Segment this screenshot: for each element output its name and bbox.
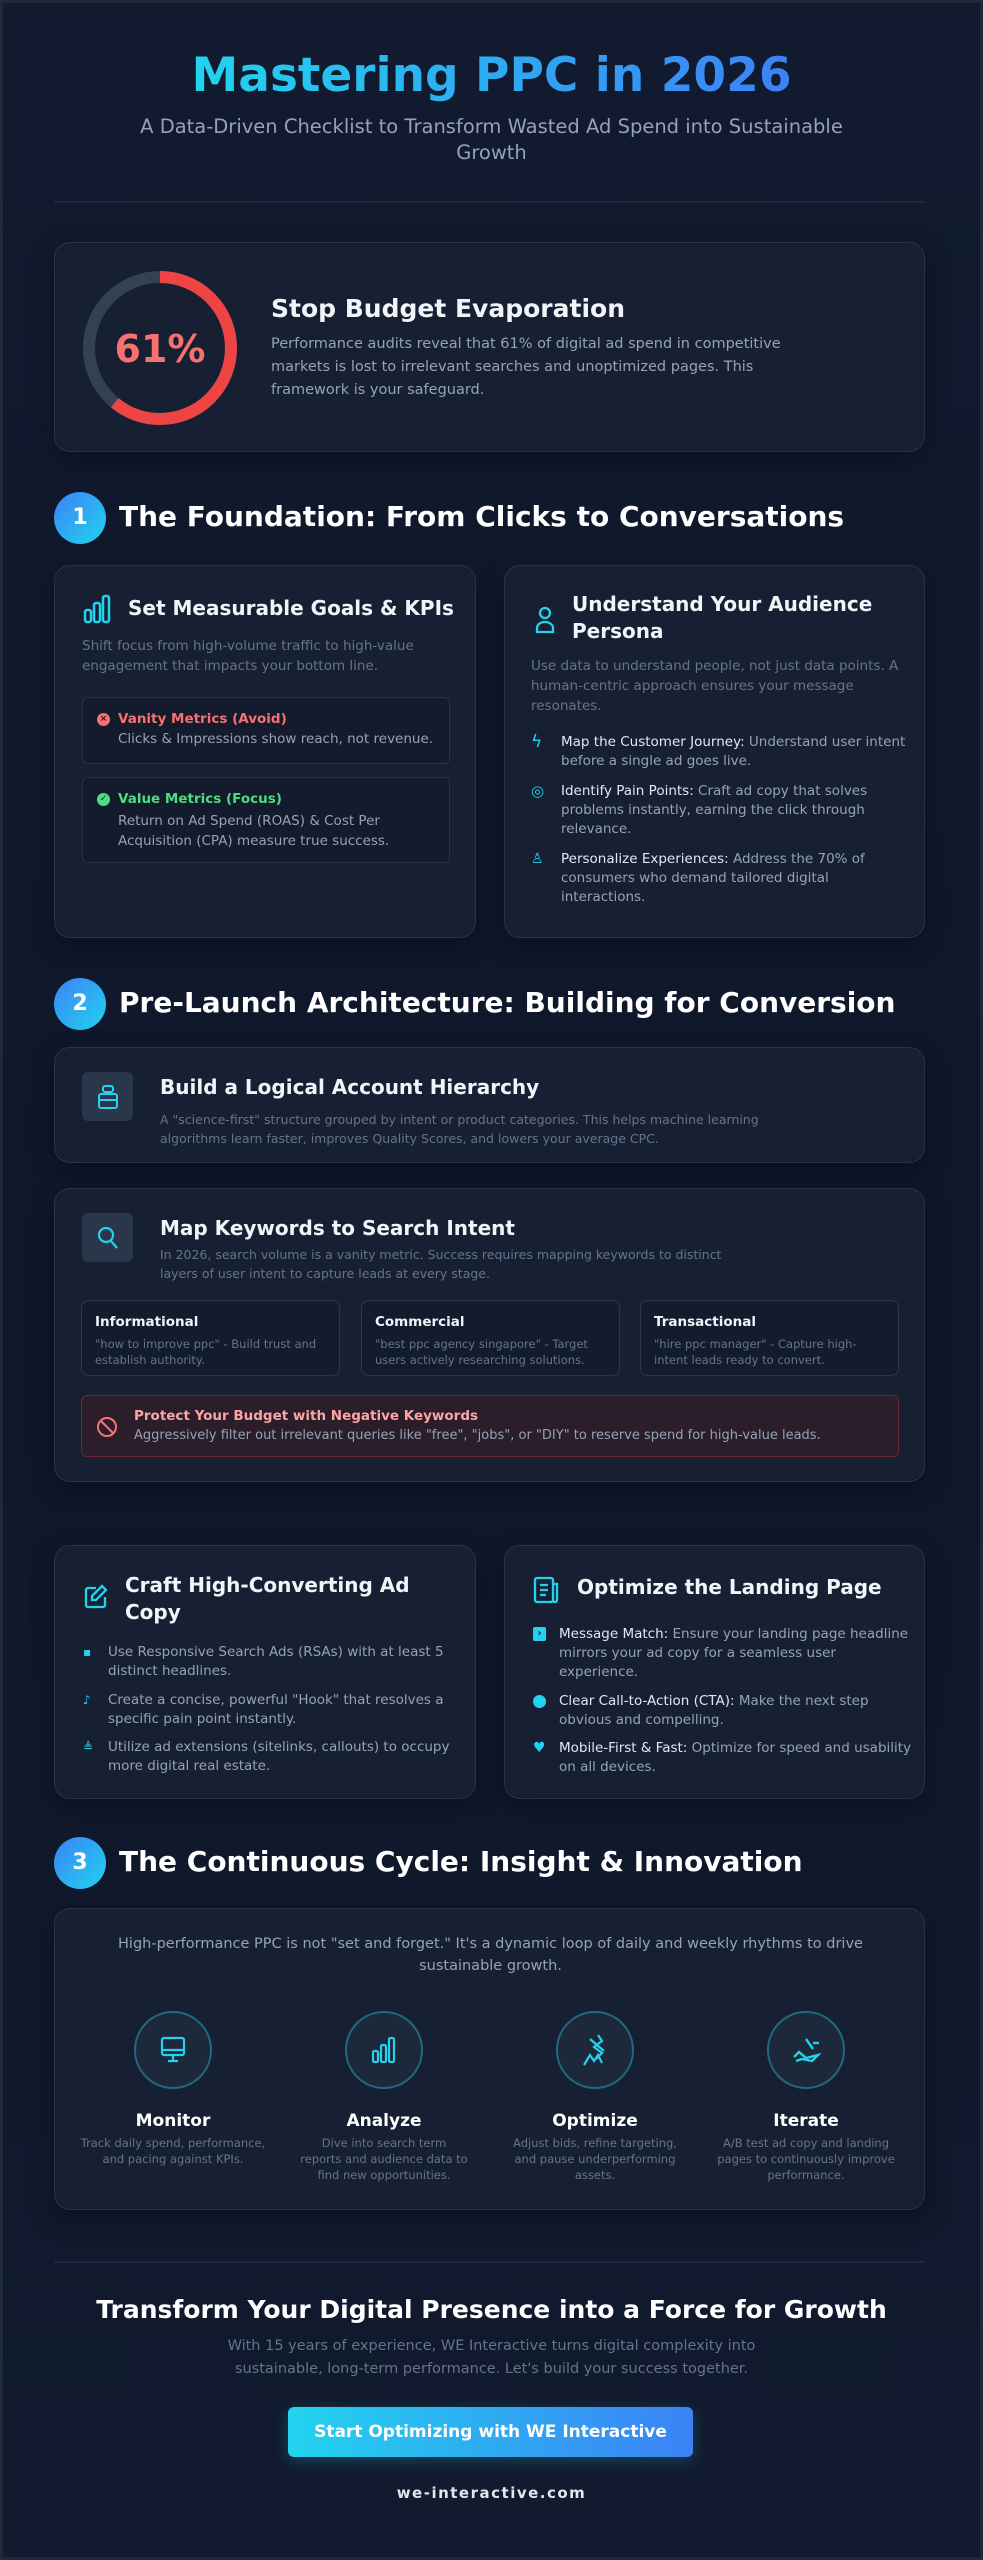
panel: landing page: Mobile-First & Fast: Optimize for speed and usability on all devices. bbox=[559, 1740, 911, 1775]
callout: negative keywords: Protect Your Budget with Negative Keywords bbox=[134, 1408, 478, 1424]
panel: ad copy: Create a concise, powerful "Hook" that resolves a specific pain point instantly. bbox=[108, 1692, 444, 1727]
icon: document bbox=[534, 1576, 558, 1604]
panel: audience persona bbox=[504, 565, 925, 938]
text: Use data to understand people, not just data points. A human-centric approach ensures your message resonates. bbox=[531, 658, 898, 714]
icon: person bbox=[536, 606, 554, 634]
heading: section 3 bbox=[54, 1837, 803, 1889]
step: analyze: Analyze bbox=[346, 2111, 422, 2131]
callout: vanity metrics bbox=[82, 697, 450, 764]
text: intro: High-performance PPC is not "set and forget." It's a dynamic loop of daily and weekly rhythms to drive sustainable growth. bbox=[118, 1936, 863, 1974]
icon: edit bbox=[84, 1584, 108, 1608]
list item: personalize: ♙ bbox=[531, 851, 544, 867]
heading: section 2: 2 bbox=[72, 991, 88, 1016]
chart: 61% ring bbox=[83, 271, 237, 425]
step: monitor: Monitor bbox=[136, 2111, 210, 2131]
icon: prohibited bbox=[97, 1417, 117, 1437]
heading: section 2 bbox=[54, 978, 895, 1030]
heading: section 1: The Foundation: From Clicks to Conversations bbox=[119, 500, 844, 533]
list: Use Responsive Search Ads (RSAs) with at least 5 distinct headlines. bbox=[108, 1644, 444, 1679]
box: transactional: Transactional bbox=[654, 1314, 756, 1330]
text: CTA description: With 15 years of experience, WE Interactive turns digital complexity into sustainable, long-term performance. Let's build your success together. bbox=[228, 2338, 755, 2377]
icon: search bbox=[82, 1213, 133, 1262]
panel: landing page bbox=[504, 1545, 925, 1799]
panel: goals & KPIs bbox=[54, 565, 476, 938]
heading: section 2: Pre-Launch Architecture: Building for Conversion bbox=[119, 986, 895, 1019]
callout: value metrics: Return on Ad Spend (ROAS) & Cost Per Acquisition (CPA) measure true success. bbox=[118, 813, 389, 849]
panel: landing page: ♥ bbox=[533, 1740, 546, 1756]
step: iterate bbox=[717, 2011, 895, 2182]
step: optimize: Adjust bids, refine targeting, and pause underperforming assets. bbox=[513, 2136, 677, 2182]
heading: Optimize the Landing Page bbox=[577, 1575, 882, 1599]
callout: value metrics: ✓ bbox=[100, 794, 107, 804]
callout: value metrics bbox=[82, 777, 450, 863]
heading: Craft High-Converting Ad Copy bbox=[125, 1573, 410, 1624]
callout: vanity metrics: Clicks & Impressions show reach, not revenue. bbox=[118, 731, 433, 747]
text: Shift focus from high-volume traffic to high-value engagement that impacts your bottom line. bbox=[82, 638, 414, 674]
panel: continuous cycle bbox=[54, 1908, 925, 2210]
heading: CTA: Transform Your Digital Presence into a Force for Growth bbox=[96, 2295, 887, 2324]
box: commercial: "best ppc agency singapore" - Target users actively researching solutions. bbox=[375, 1337, 588, 1367]
icon: bar chart bbox=[84, 594, 110, 624]
button: CTA: Start Optimizing with WE Interactive bbox=[314, 2422, 667, 2442]
panel: stat card bbox=[54, 242, 925, 452]
heading: section 1 bbox=[54, 492, 844, 544]
heading: Map Keywords to Search Intent bbox=[160, 1216, 515, 1240]
icon: layers bbox=[82, 1072, 133, 1121]
panel: landing page: Clear Call-to-Action (CTA): Make the next step obvious and compelling. bbox=[559, 1693, 869, 1728]
text: A "science-first" structure grouped by intent or product categories. This helps machine learning algorithms learn faster, improves Quality Scores, and lowers your average CPC. bbox=[160, 1112, 759, 1146]
list item: pain points: Identify Pain Points: Craft ad copy that solves problems instantly, earning the click through relevance. bbox=[561, 783, 867, 837]
heading: section 3: 3 bbox=[72, 1850, 88, 1875]
heading: Understand Your Audience Persona bbox=[572, 592, 872, 643]
box: informational: "how to improve ppc" - Build trust and establish authority. bbox=[95, 1337, 316, 1367]
box: commercial: Commercial bbox=[375, 1314, 464, 1330]
list item: personalize: Personalize Experiences: Address the 70% of consumers who demand tailored digital interactions. bbox=[561, 851, 865, 905]
heading: section 3: The Continuous Cycle: Insight & Innovation bbox=[119, 1845, 803, 1878]
heading: Set Measurable Goals & KPIs bbox=[128, 596, 454, 620]
panel: ad copy: Utilize ad extensions (sitelinks, callouts) to occupy more digital real estate. bbox=[108, 1739, 449, 1774]
callout: vanity metrics: Vanity Metrics (Avoid) bbox=[118, 711, 287, 727]
list: Message Match: Ensure your landing page headline mirrors your ad copy for a seamless user experience. bbox=[559, 1626, 908, 1680]
box: commercial bbox=[361, 1300, 620, 1376]
list item: journey: Map the Customer Journey: Understand user intent before a single ad goes live. bbox=[561, 734, 905, 769]
panel: account hierarchy bbox=[54, 1047, 925, 1163]
panel: ad copy: ≜ bbox=[83, 1740, 93, 1754]
heading: section 1: 1 bbox=[72, 505, 88, 530]
step: analyze bbox=[300, 2011, 468, 2182]
step: optimize bbox=[513, 2011, 677, 2182]
panel: keywords intent bbox=[54, 1188, 925, 1482]
heading: Build a Logical Account Hierarchy bbox=[160, 1075, 539, 1099]
button: CTA bbox=[288, 2407, 693, 2457]
step: analyze: Dive into search term reports and audience data to find new opportunities. bbox=[300, 2136, 468, 2182]
box: transactional bbox=[640, 1300, 899, 1376]
step: monitor: Track daily spend, performance, and pacing against KPIs. bbox=[81, 2136, 265, 2166]
step: monitor bbox=[80, 2011, 265, 2166]
text: In 2026, search volume is a vanity metric. Success requires mapping keywords to distinct layers of user intent to capture leads at every stage. bbox=[160, 1247, 721, 1281]
title: Mastering PPC in 2026 bbox=[191, 48, 792, 103]
step: iterate: Iterate bbox=[773, 2111, 839, 2131]
text: stat description: Performance audits reveal that 61% of digital ad spend in competitive markets is lost to irrelevant searches and unoptimized pages. This framework is your safeguard. bbox=[271, 336, 781, 398]
callout: vanity metrics: × bbox=[100, 714, 107, 724]
box: transactional: "hire ppc manager" - Capture high-intent leads ready to convert. bbox=[654, 1337, 857, 1367]
subtitle: A Data-Driven Checklist to Transform Wasted Ad Spend into Sustainable Growth bbox=[140, 115, 843, 164]
box: informational: Informational bbox=[95, 1314, 198, 1330]
list item: pain points: ◎ bbox=[531, 782, 544, 800]
text: url: we-interactive.com bbox=[397, 2484, 586, 2502]
step: optimize: Optimize bbox=[552, 2111, 638, 2131]
heading: stop budget: Stop Budget Evaporation bbox=[271, 294, 625, 323]
list: ▪ bbox=[83, 1645, 91, 1659]
chart: 61% ring: 61% bbox=[115, 327, 205, 371]
callout: negative keywords bbox=[81, 1395, 899, 1457]
list: › bbox=[537, 1628, 542, 1639]
panel: ad copy bbox=[54, 1545, 476, 1799]
callout: negative keywords: Aggressively filter out irrelevant queries like "free", "jobs", or "DIY" to reserve spend for high-value leads. bbox=[134, 1428, 821, 1443]
panel: ad copy: ♪ bbox=[83, 1693, 91, 1707]
box: informational bbox=[81, 1300, 340, 1376]
list item: journey: ϟ bbox=[531, 732, 542, 752]
callout: value metrics: Value Metrics (Focus) bbox=[118, 791, 282, 807]
step: iterate: A/B test ad copy and landing pages to continuously improve performance. bbox=[717, 2136, 895, 2182]
